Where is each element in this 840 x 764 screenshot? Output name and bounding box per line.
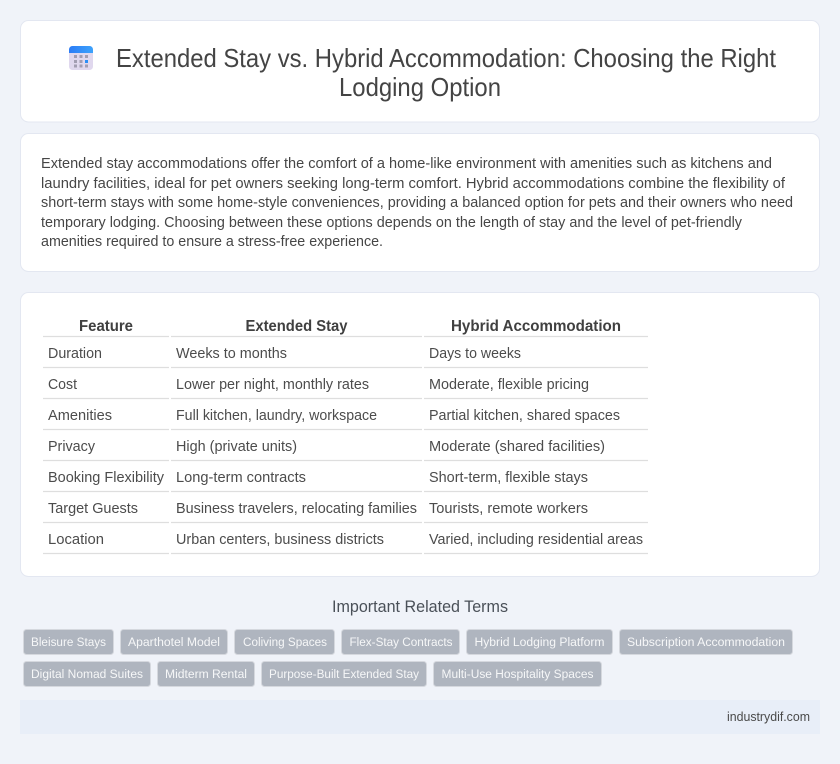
icon: calendar: [69, 46, 93, 70]
title: Extended Stay vs. Hybrid Accommodation: Choosing the Right: [116, 45, 776, 73]
text block: introduction: short-term stays with some home-style conveniences, providing a balanced option for pets and their owners who need: [41, 195, 793, 211]
row: privacy: High (private units): [176, 439, 297, 455]
table header: Feature: [79, 318, 133, 335]
tag: Midterm Rental: [165, 667, 247, 681]
row: amenities: [48, 408, 620, 424]
text block: introduction: temporary lodging. Choosing between these options depends on the length of stay and the level of pet-friendly: [41, 215, 743, 231]
row: cost: Cost: [48, 377, 77, 393]
row: privacy: Moderate (shared facilities): [429, 439, 605, 455]
row: target guests: Business travelers, relocating families: [176, 501, 417, 517]
heading: important related terms: Important Related Terms: [332, 598, 508, 616]
title: Lodging Option: [339, 74, 501, 102]
row: booking flexibility: Long-term contracts: [176, 470, 306, 486]
row: location: [48, 532, 643, 548]
title: [116, 45, 776, 102]
tags: related terms: [24, 630, 792, 686]
text block: introduction: Extended stay accommodations offer the comfort of a home-like environment with amenities such as kitchens and: [41, 156, 772, 172]
footer bar: [20, 700, 820, 734]
row: duration: Duration: [48, 346, 102, 362]
tag: [434, 662, 602, 686]
tag: [158, 662, 254, 686]
row: location: Location: [48, 532, 104, 548]
row: amenities: Full kitchen, laundry, workspace: [176, 408, 377, 424]
tag: [234, 630, 334, 654]
row: booking flexibility: Booking Flexibility: [48, 470, 165, 486]
row: cost: Moderate, flexible pricing: [429, 377, 589, 393]
row: duration: [48, 346, 521, 362]
row: amenities: Amenities: [48, 408, 112, 424]
tag: Flex-Stay Contracts: [350, 635, 452, 649]
tag: Hybrid Lodging Platform: [474, 635, 604, 649]
row: target guests: Tourists, remote workers: [429, 501, 588, 517]
row: booking flexibility: [48, 470, 588, 486]
row: duration: Weeks to months: [176, 346, 287, 362]
table header: Extended Stay: [246, 318, 348, 335]
row: booking flexibility: Short-term, flexible stays: [429, 470, 588, 486]
tag: Bleisure Stays: [31, 635, 106, 649]
tag: [466, 630, 612, 654]
panel: title header: [20, 20, 820, 122]
tag: [262, 662, 426, 686]
tag: Subscription Accommodation: [627, 635, 785, 649]
row: duration: Days to weeks: [429, 346, 521, 362]
tag: Coliving Spaces: [243, 635, 327, 649]
footer source: industrydif.com: [727, 709, 810, 724]
tag: [120, 630, 228, 654]
tag: [342, 630, 460, 654]
tag: Purpose-Built Extended Stay: [269, 667, 420, 681]
tag: [24, 662, 150, 686]
row: target guests: [48, 501, 588, 517]
tag: [24, 630, 114, 654]
tag: Aparthotel Model: [128, 635, 220, 649]
text block: introduction: amenities required to ensure a stress-free experience.: [41, 234, 383, 250]
row: amenities: Partial kitchen, shared spaces: [429, 408, 620, 424]
text block: introduction: laundry facilities, ideal for pet owners seeking long-term comfort. Hybrid accommodations combine the flexibility of: [41, 176, 786, 192]
row: target guests: Target Guests: [48, 501, 138, 517]
panel: introduction text: [20, 134, 820, 272]
table header: [79, 318, 621, 335]
tag: Multi-Use Hospitality Spaces: [442, 667, 594, 681]
text block: introduction: [41, 156, 793, 250]
row: location: Varied, including residential areas: [429, 532, 643, 548]
table header: Hybrid Accommodation: [451, 318, 621, 335]
row: location: Urban centers, business districts: [176, 532, 384, 548]
panel: comparison table: [20, 292, 820, 576]
row: privacy: Privacy: [48, 439, 96, 455]
tag: [620, 630, 792, 654]
row: cost: [48, 377, 589, 393]
row: cost: Lower per night, monthly rates: [176, 377, 369, 393]
row: privacy: [48, 439, 605, 455]
tag: Digital Nomad Suites: [31, 667, 143, 681]
